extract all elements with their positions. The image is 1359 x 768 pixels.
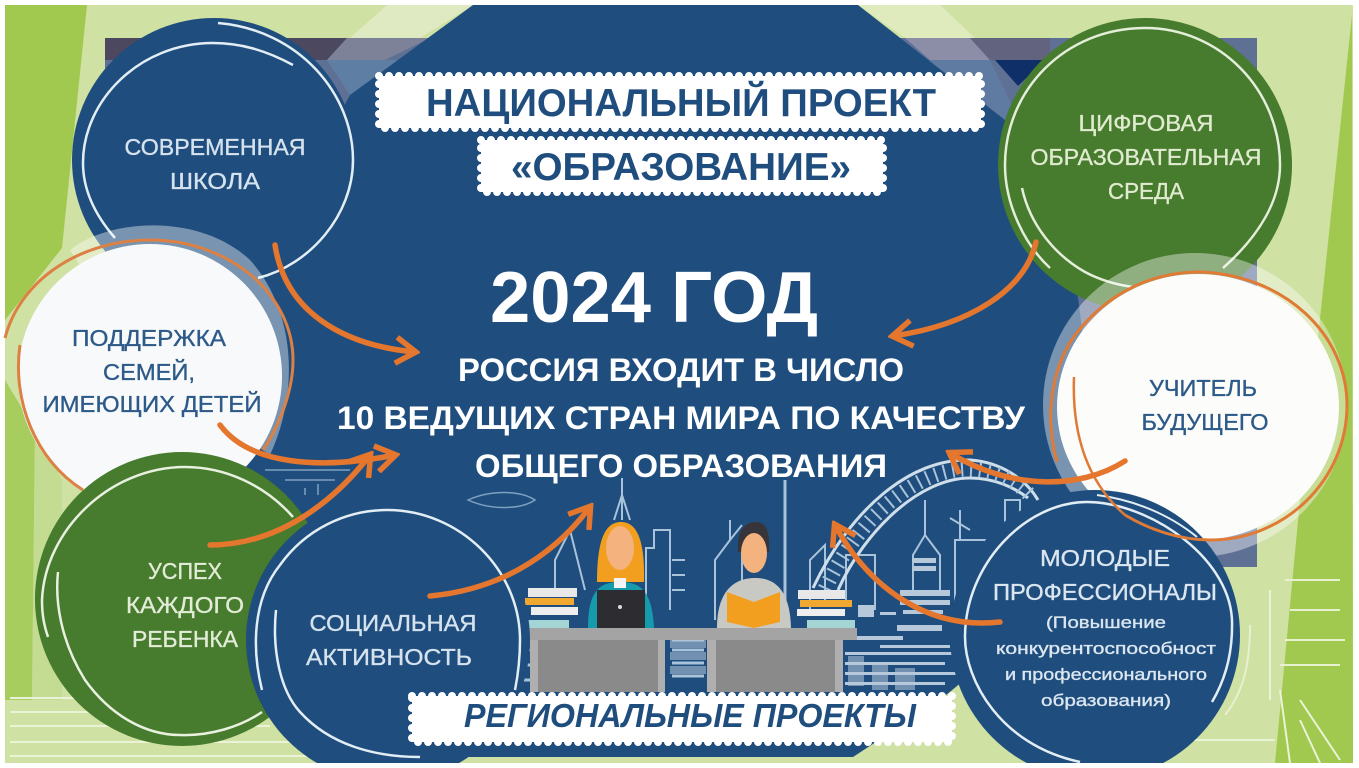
illustration: girl with laptop (588, 522, 654, 628)
footer box (412, 696, 952, 742)
main text: 2024 ГОД (490, 258, 818, 338)
dark screen panel (105, 38, 1257, 567)
circle: социальная активность (246, 498, 530, 768)
title text: НАЦИОНАЛЬНЫЙ ПРОЕКТ (426, 80, 936, 125)
circle: молодые профессионалы: образования) (1041, 691, 1171, 710)
main text: 10 ВЕДУЩИХ СТРАН МИРА ПО КАЧЕСТВУ (337, 400, 1026, 436)
circle: молодые профессионалы: (Повышение (1046, 613, 1166, 632)
illustration: bridge truss (813, 460, 1038, 590)
title text (426, 80, 936, 189)
title text: «ОБРАЗОВАНИЕ» (511, 146, 851, 189)
illustration: books right (797, 590, 855, 628)
circle: цифровая образовательная среда: ЦИФРОВАЯ (1078, 110, 1214, 136)
circle: учитель будущего: УЧИТЕЛЬ (1149, 375, 1257, 401)
main text: РОССИЯ ВХОДИТ В ЧИСЛО (458, 352, 904, 388)
circle: социальная активность: АКТИВНОСТЬ (306, 644, 472, 670)
circle: молодые профессионалы (950, 490, 1240, 768)
circle: цифровая образовательная среда: СРЕДА (1108, 178, 1185, 204)
circle: молодые профессионалы: и профессионального (1005, 665, 1207, 684)
circle: успех каждого ребенка (35, 452, 329, 746)
circle: молодые профессионалы: ПРОФЕССИОНАЛЫ (993, 579, 1217, 605)
circle: молодые профессионалы: МОЛОДЫЕ (1040, 545, 1170, 571)
ring: учитель будущего orange outline (1051, 272, 1347, 540)
circle: поддержка семей: ИМЕЮЩИХ ДЕТЕЙ (42, 390, 262, 417)
central blue shape (240, 5, 1110, 757)
circle: молодые профессионалы: конкурентоспособност (996, 639, 1216, 658)
circle: цифровая образовательная среда: ОБРАЗОВАТЕЛЬНАЯ (1030, 144, 1262, 170)
circle: цифровая образовательная среда (998, 18, 1292, 312)
circle: социальная активность: СОЦИАЛЬНАЯ (310, 610, 476, 636)
illustration: desks (522, 628, 857, 692)
circle: успех каждого ребенка: КАЖДОГО (126, 592, 244, 618)
circle: учитель будущего: БУДУЩЕГО (1142, 409, 1268, 435)
main text (337, 258, 1026, 484)
illustration: city skyline (265, 470, 1020, 680)
illustration: city block details (670, 558, 957, 690)
circle: современная школа: ШКОЛА (170, 168, 261, 194)
circle: успех каждого ребенка: УСПЕХ (148, 558, 222, 584)
arrows (210, 242, 1125, 623)
circle: поддержка семей: ПОДДЕРЖКА (72, 325, 227, 351)
illustration: boy with book (717, 522, 791, 628)
main text: ОБЩЕГО ОБРАЗОВАНИЯ (475, 448, 887, 484)
footer box: РЕГИОНАЛЬНЫЕ ПРОЕКТЫ (464, 697, 917, 734)
illustration: books left (523, 588, 578, 628)
circle: учитель будущего (1043, 253, 1347, 557)
circle: современная школа: СОВРЕМЕННАЯ (124, 134, 306, 160)
circle: поддержка семей: СЕМЕЙ, (103, 358, 195, 385)
title box (379, 76, 981, 192)
circle: поддержка семей (5, 225, 293, 508)
circle: современная школа (72, 18, 356, 302)
circle: успех каждого ребенка: РЕБЕНКА (132, 626, 239, 652)
